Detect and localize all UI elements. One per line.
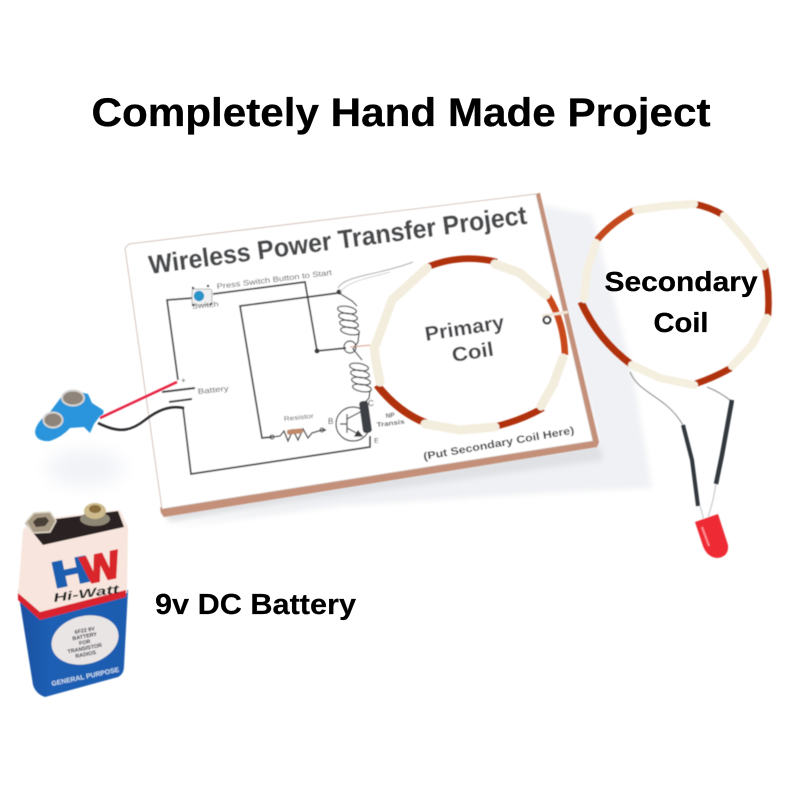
label oval: TRANSISTOR (67, 643, 103, 655)
clip terminals (62, 390, 84, 406)
battery clip with wires (35, 382, 184, 441)
Hi-Watt brand: Hi-Watt (52, 582, 121, 605)
circuit labels: C (368, 399, 374, 408)
HW logo: W (78, 544, 124, 593)
primary coil (338, 259, 568, 430)
circuit labels: B (328, 417, 333, 426)
circuit labels: Resistor (283, 413, 315, 423)
battery symbol (162, 376, 195, 402)
transistor (336, 400, 372, 441)
label oval (46, 608, 124, 672)
LED leads (700, 484, 716, 520)
label oval: 6F22 9V (74, 626, 96, 636)
heat shrink tubes (683, 425, 698, 506)
secondary coil label: Secondary (604, 266, 758, 297)
label oval: BATTERY (72, 632, 98, 642)
label oval: FOR (79, 639, 91, 647)
9V battery (18, 503, 128, 697)
label oval: RADIOS (75, 650, 97, 660)
round terminal (80, 512, 110, 526)
circuit labels: Battery (197, 384, 229, 396)
circuit labels (191, 268, 406, 445)
primary coil label: Primary (423, 312, 507, 346)
resistor (270, 428, 324, 441)
secondary coil (581, 204, 769, 425)
LED assembly (683, 400, 732, 558)
battery body blue (18, 590, 128, 697)
board white face (125, 194, 593, 509)
general purpose: GENERAL PURPOSE (51, 667, 120, 688)
battery body cream (18, 510, 128, 614)
red and black wires (100, 382, 177, 418)
project board (125, 193, 599, 517)
circuit labels: E (374, 438, 379, 445)
inductor coil (337, 293, 372, 404)
red band (18, 590, 126, 620)
LED body (695, 514, 728, 558)
circuit labels: Press Switch Button to Start (216, 268, 333, 291)
board heading: Wireless Power Transfer Project (147, 200, 529, 280)
circuit labels: Transis (376, 419, 406, 429)
HW logo (48, 544, 124, 596)
project board: Coil (450, 339, 495, 367)
secondary coil label: Coil (654, 307, 708, 338)
circuit labels: Switch (191, 301, 219, 311)
blue clip (35, 392, 104, 441)
secondary coil placement note: (Put Secondary Coil Here) (422, 425, 575, 463)
secondary coil label (604, 266, 758, 338)
battery symbol: + (181, 376, 186, 385)
circuit wiring (167, 282, 370, 474)
soft shadows on the table (47, 205, 652, 528)
circuit labels: NP (385, 412, 396, 420)
junction dots (314, 290, 342, 354)
HW logo: H (48, 548, 94, 596)
battery top (25, 511, 124, 545)
switch (192, 285, 212, 306)
title: Completely Hand Made Project (92, 91, 710, 135)
battery caption: 9v DC Battery (155, 589, 356, 621)
board copper edge (160, 193, 599, 517)
hex terminal (26, 512, 56, 533)
